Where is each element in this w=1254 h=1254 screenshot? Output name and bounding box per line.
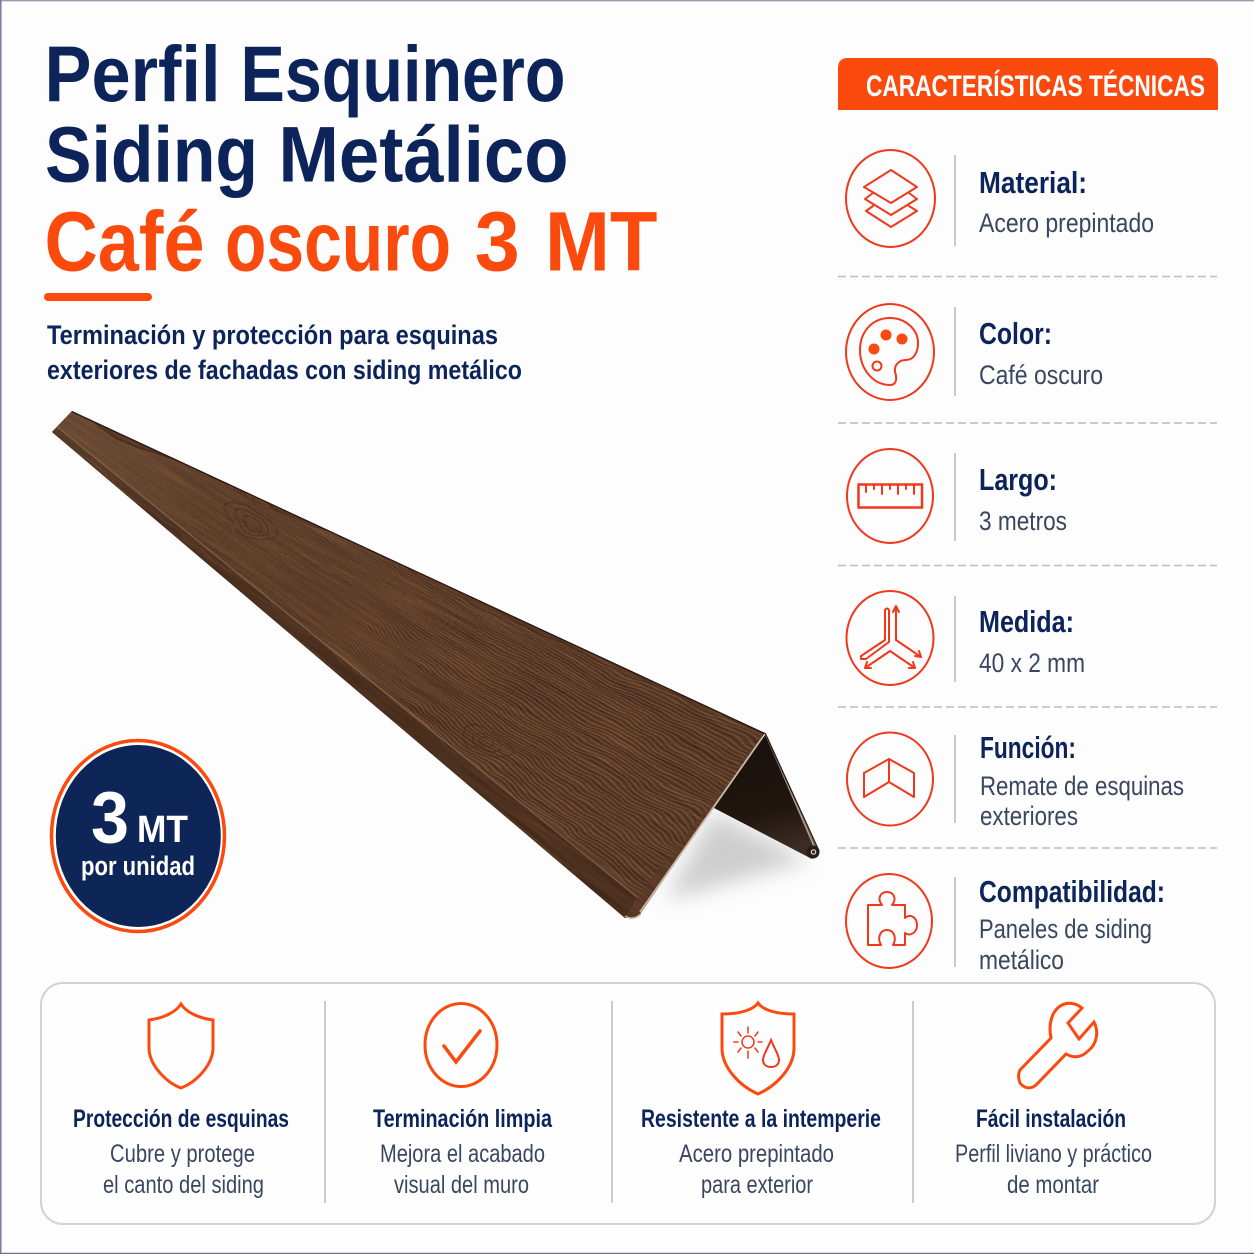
panel: benefits <box>41 983 1215 1224</box>
title <box>44 29 658 288</box>
icon: material layers <box>846 150 935 247</box>
icon: puzzle piece <box>846 874 932 968</box>
icon: check circle <box>425 1004 497 1086</box>
icon: wrench <box>1018 1003 1097 1088</box>
spec text: measure: Medida: <box>979 604 1074 639</box>
title: Metálico <box>278 110 568 198</box>
spec text: function: Remate de esquinas <box>980 771 1184 801</box>
spec text: length <box>979 462 1067 536</box>
benefit: corner protection <box>73 1105 289 1199</box>
spec text: color <box>979 316 1103 390</box>
title: Siding <box>45 110 258 198</box>
spec text: length: 3 metros <box>979 506 1067 536</box>
benefit: corner protection: Protección de esquinas <box>73 1105 289 1133</box>
icon: color palette <box>846 304 934 400</box>
spec text: compatibility <box>979 874 1165 975</box>
benefit: weather resistant <box>641 1105 881 1199</box>
badge: 3 MT por unidad: por unidad <box>81 851 195 881</box>
benefit: weather resistant: Acero prepintado <box>679 1140 834 1168</box>
spec text: function: Función: <box>980 730 1076 765</box>
badge: 3 MT por unidad: 3 <box>91 778 129 858</box>
spec text: material: Acero prepintado <box>979 208 1154 238</box>
technical specs header <box>838 58 1218 110</box>
benefit: clean finish: Terminación limpia <box>373 1105 553 1133</box>
badge: 3 MT por unidad: MT <box>137 809 188 851</box>
benefit: easy installation <box>955 1105 1152 1199</box>
spec text: length: Largo: <box>979 462 1057 497</box>
icon: weather shield <box>722 1003 794 1094</box>
spec text: measure: 40 x 2 mm <box>979 648 1085 678</box>
benefit: weather resistant: Resistente a la intemperie <box>641 1105 881 1133</box>
subtitle: Terminación y protección para esquinas <box>47 320 498 350</box>
spec text: color: Café oscuro <box>979 360 1103 390</box>
title accent bar <box>44 293 152 301</box>
spec text: compatibility: Paneles de siding <box>979 914 1152 944</box>
spec text: color: Color: <box>979 316 1052 351</box>
icon: exterior corner <box>847 732 933 826</box>
benefit: clean finish: visual del muro <box>394 1171 529 1199</box>
spec text: compatibility: Compatibilidad: <box>979 874 1165 909</box>
title: 3 <box>475 194 520 288</box>
benefit: corner protection: Cubre y protege <box>110 1140 255 1168</box>
spec text: function <box>980 730 1184 831</box>
title: Perfil <box>44 29 220 118</box>
spec text: function: exteriores <box>980 801 1078 831</box>
title: oscuro <box>225 194 451 288</box>
spec text: material: Material: <box>979 165 1087 200</box>
product: corner profile <box>52 411 820 919</box>
badge: 3 MT por unidad <box>52 740 224 932</box>
icon: shield <box>149 1004 213 1088</box>
benefit: corner protection: el canto del siding <box>103 1171 264 1199</box>
benefit: easy installation: Fácil instalación <box>976 1105 1126 1133</box>
benefit: clean finish: Mejora el acabado <box>380 1140 545 1168</box>
benefit: easy installation: de montar <box>1007 1171 1099 1199</box>
spec text: material <box>979 165 1154 238</box>
icon: ruler <box>847 449 933 543</box>
benefit: easy installation: Perfil liviano y práctico <box>955 1140 1152 1168</box>
title: Esquinero <box>240 29 566 118</box>
title: Café <box>44 194 204 288</box>
title: MT <box>545 194 658 288</box>
spec text: compatibility: metálico <box>979 945 1064 975</box>
spec text: measure <box>979 604 1085 678</box>
subtitle <box>47 320 522 385</box>
benefit: weather resistant: para exterior <box>701 1171 813 1199</box>
benefit: clean finish <box>373 1105 553 1199</box>
subtitle: exteriores de fachadas con siding metálico <box>47 355 522 385</box>
icon: profile measurements <box>846 591 934 685</box>
